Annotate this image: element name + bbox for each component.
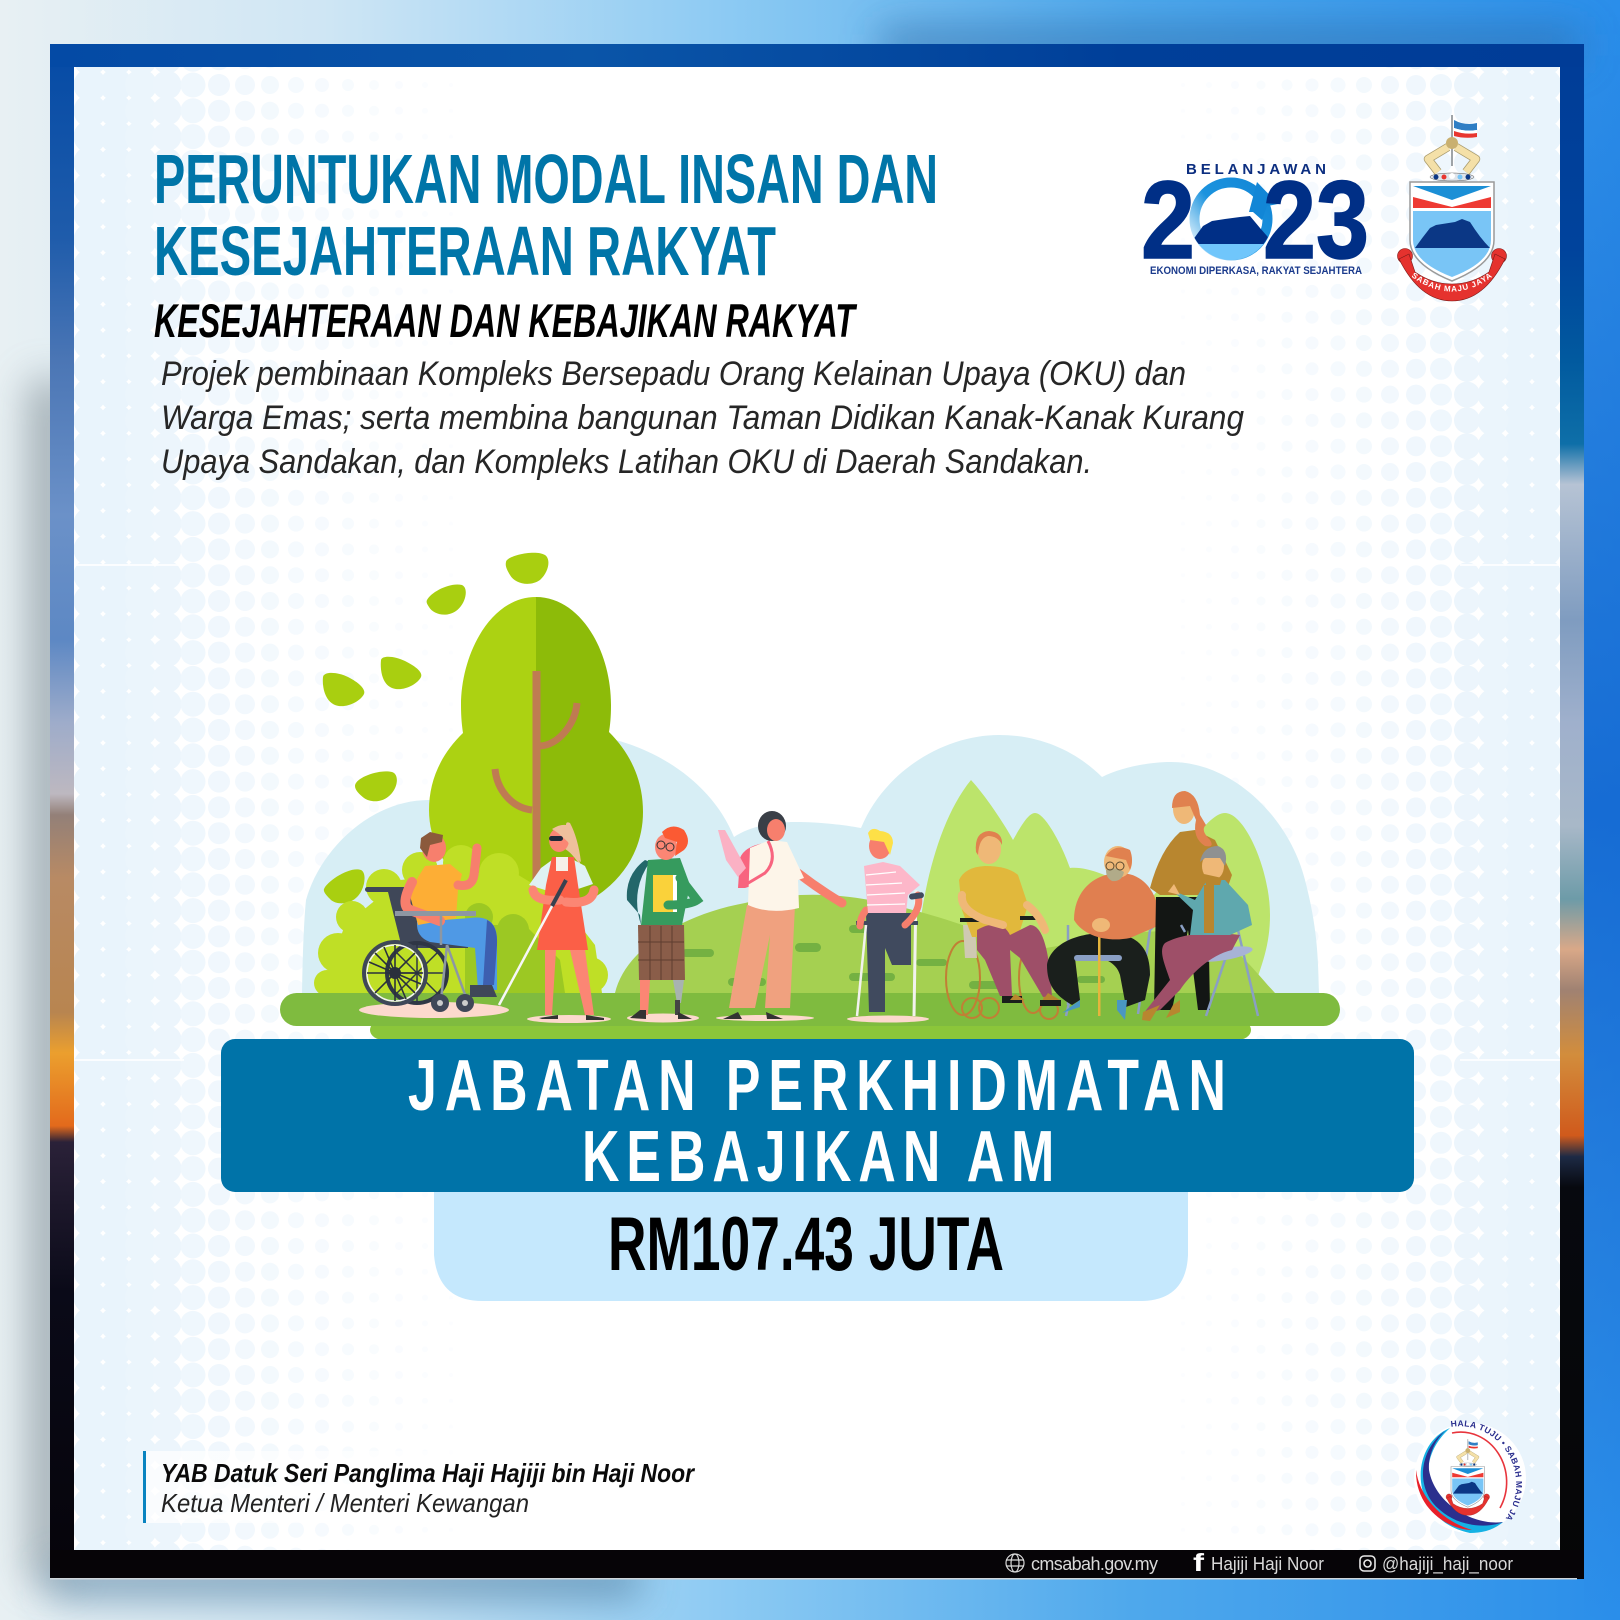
bushes (314, 845, 608, 996)
hill stripes (682, 925, 1105, 989)
social links bar (1006, 1549, 1513, 1577)
person: elderly man in wheelchair (946, 831, 1061, 1019)
body text (161, 355, 1244, 481)
ground (280, 993, 1340, 1040)
icon: facebook: f (1193, 1549, 1205, 1577)
amount plate (434, 1180, 1188, 1301)
person: seated elderly woman (1142, 846, 1258, 1021)
subheading: KESEJAHTERAAN DAN KEBAJIKAN RAKYAT (154, 294, 858, 347)
person: standing caregiver (1150, 791, 1232, 1010)
body text: Warga Emas; serta membina bangunan Taman Didikan Kanak-Kanak Kurang (161, 399, 1244, 437)
logo: Belanjawan 2023: BELANJAWAN (1186, 161, 1326, 178)
social links bar: cmsabah.gov.my (1031, 1554, 1158, 1574)
body text: Upaya Sandakan, dan Kompleks Latihan OKU di Daerah Sandakan. (161, 443, 1092, 481)
attribution (143, 1451, 726, 1523)
social links bar: @hajiji_haji_noor (1382, 1554, 1513, 1575)
illustration: park scene (280, 553, 1340, 1040)
logo: Belanjawan 2023: 23 (1263, 159, 1369, 282)
amount: RM107.43 JUTA (608, 1202, 1004, 1287)
social links bar: Hajiji Haji Noor (1211, 1554, 1324, 1574)
title: PERUNTUKAN MODAL INSAN DAN (154, 140, 938, 218)
logo: Sabah crest: SABAH MAJU JAYA (1412, 272, 1492, 292)
icon: globe (1006, 1554, 1024, 1572)
panel: department banner (221, 1039, 1414, 1301)
title: KESEJAHTERAAN RAKYAT (154, 212, 776, 290)
banner heading: KEBAJIKAN AM (582, 1117, 1054, 1197)
person: boy on crutches (847, 829, 929, 1022)
attribution: YAB Datuk Seri Panglima Haji Hajiji bin Haji Noor (161, 1458, 696, 1488)
tree (429, 597, 643, 920)
logo: Hala Tuju Sabah Maju Jaya: HALA TUJU • SABAH MAJU JAYA (1450, 1420, 1522, 1520)
logo: Belanjawan 2023: 2 (1141, 159, 1195, 282)
icon: instagram (1360, 1556, 1375, 1571)
falling leaves (323, 553, 548, 903)
logo: Belanjawan 2023 (1144, 164, 1366, 276)
hill: mid green (615, 895, 1275, 993)
person: man in wheelchair (359, 832, 509, 1018)
person: elderly man with walking stick (1047, 846, 1160, 1020)
person: boy with book and prosthetic leg (627, 826, 699, 1022)
logo: Belanjawan 2023: EKONOMI DIPERKASA, RAKYAT SEJAHTERA (1150, 265, 1362, 277)
logo: Sabah crest (1397, 115, 1507, 302)
banner heading (408, 1046, 1226, 1197)
person: blind woman with white cane (499, 822, 611, 1023)
body text: Projek pembinaan Kompleks Bersepadu Orang Kelainan Upaya (OKU) dan (161, 355, 1186, 393)
attribution: Ketua Menteri / Menteri Kewangan (161, 1488, 529, 1518)
person: woman with prosthetic arm and backpack (716, 811, 842, 1021)
title (154, 140, 938, 290)
banner heading: JABATAN PERKHIDMATAN (408, 1046, 1226, 1126)
hills: light green mountains (915, 780, 1270, 993)
hills: pale blue background (302, 735, 1319, 993)
